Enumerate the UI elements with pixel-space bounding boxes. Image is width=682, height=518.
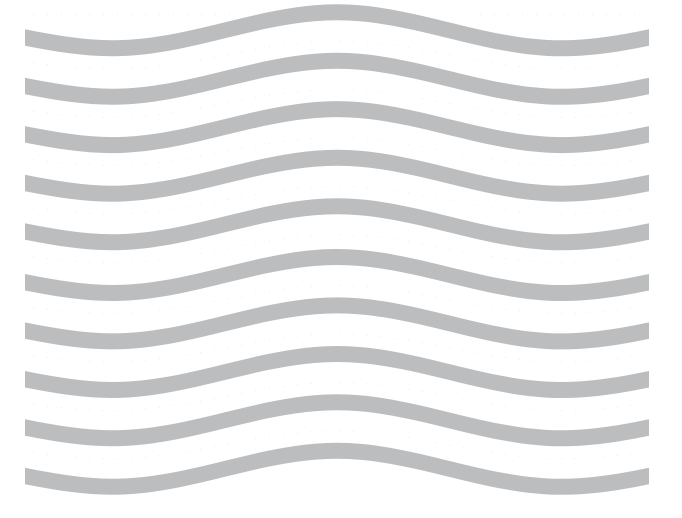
- wave band 5: [25, 198, 649, 250]
- wave band 9: [25, 394, 649, 446]
- wave band 8: [25, 346, 649, 398]
- wave band 4: [25, 150, 649, 202]
- wave band 2: [25, 53, 649, 105]
- wave band 3: [25, 101, 649, 153]
- wave band 10: [25, 443, 649, 495]
- wave band 7: [25, 297, 649, 349]
- wave band 1: [25, 4, 649, 56]
- wave band 6: [25, 249, 649, 301]
